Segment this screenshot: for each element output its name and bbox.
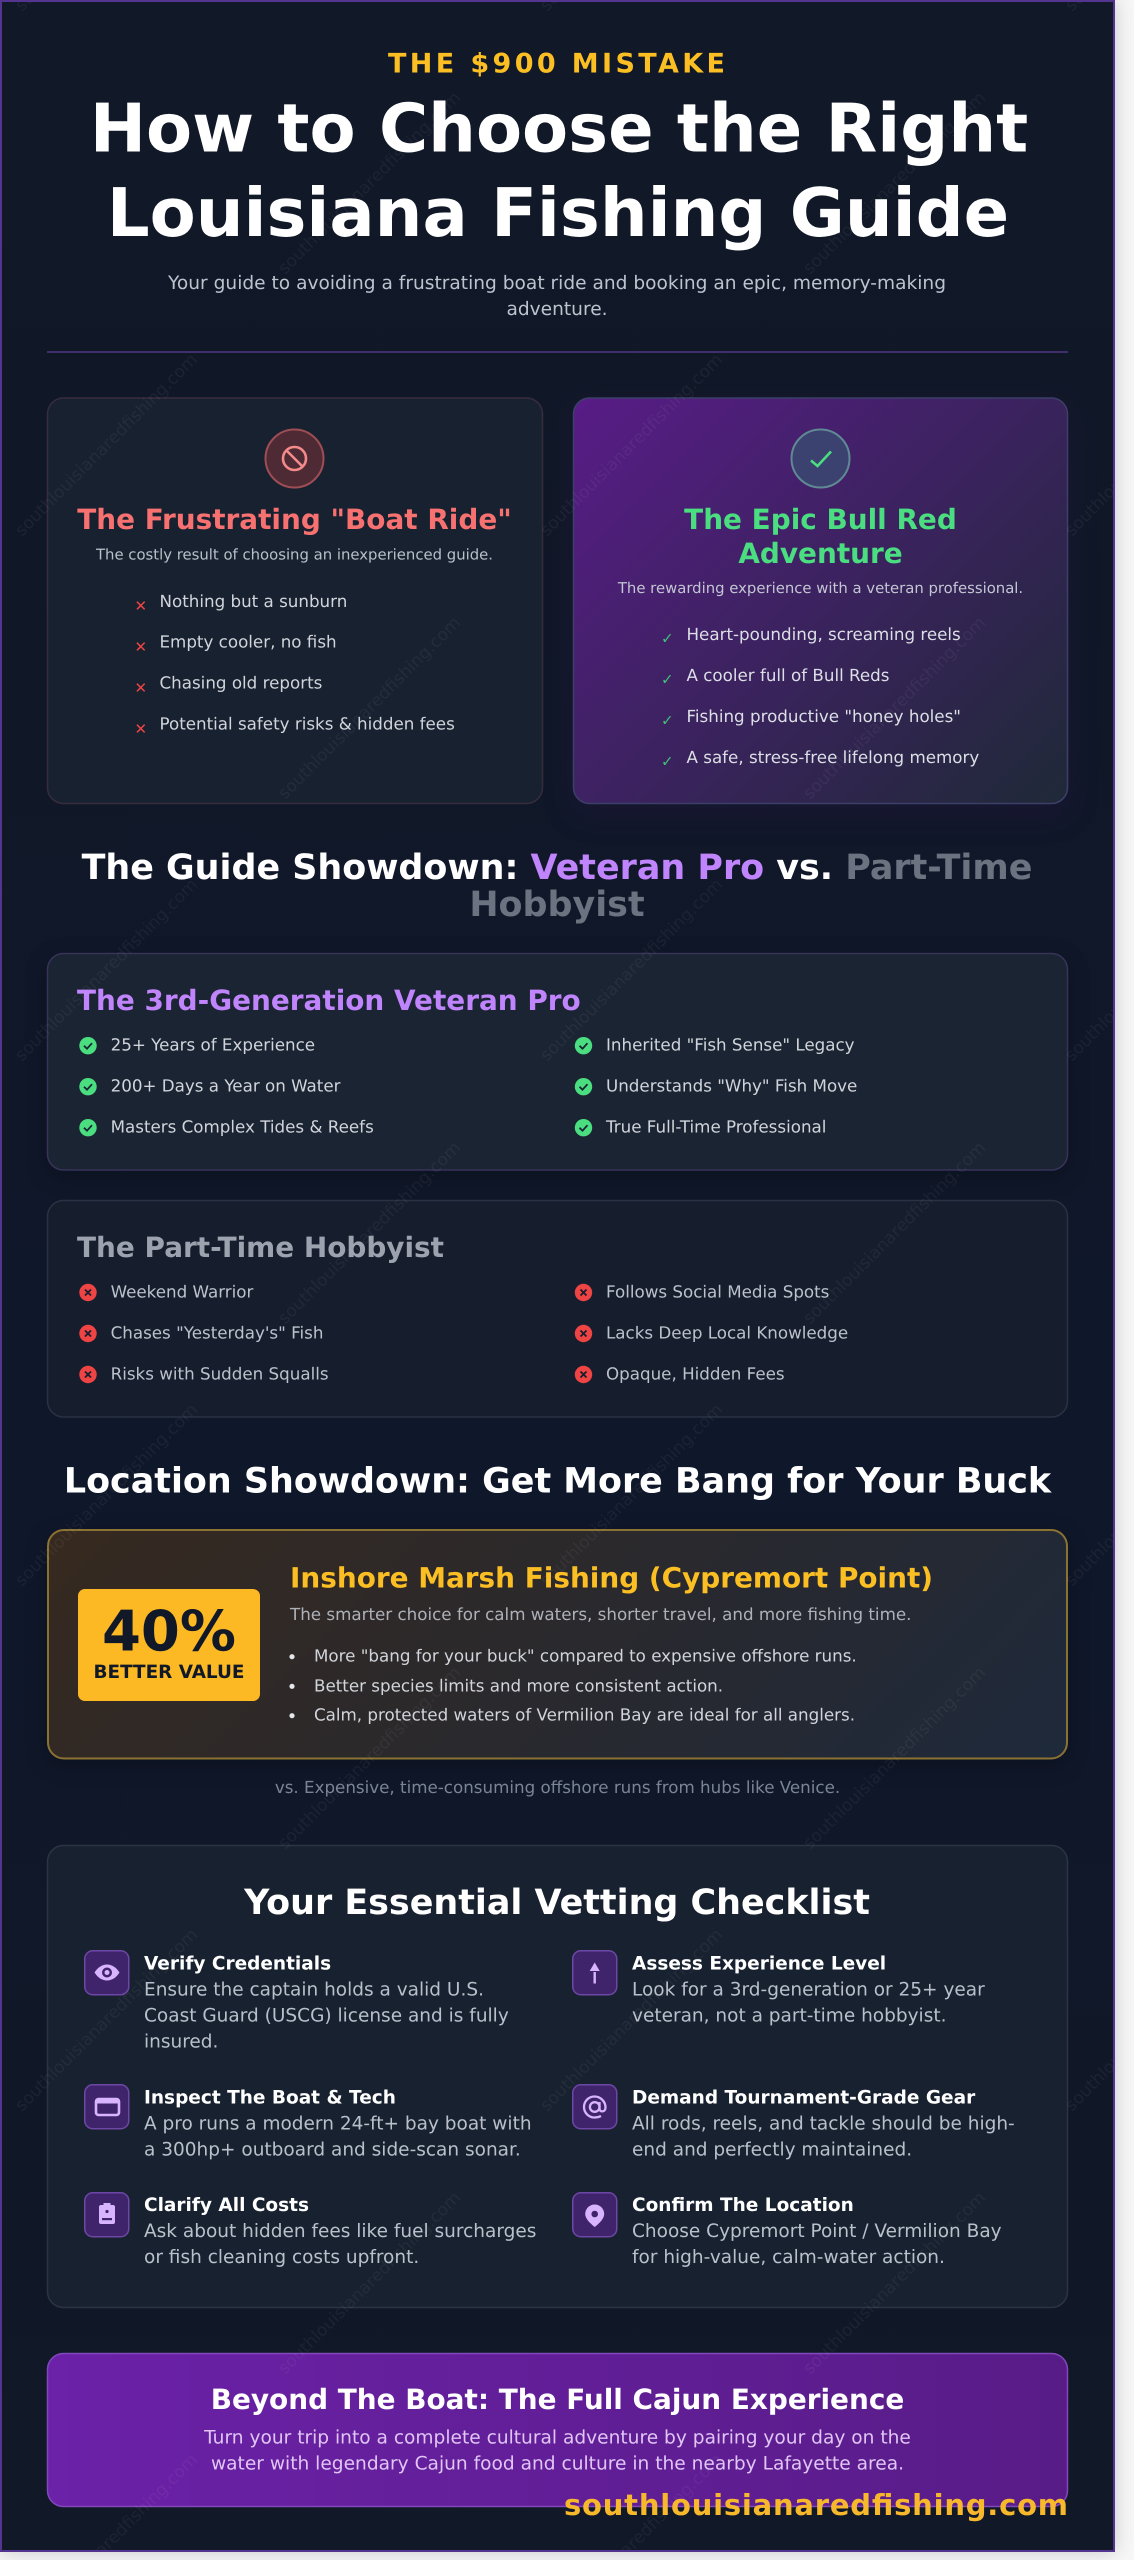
item: verify credentials: Coast Guard (USCG) license and is fully bbox=[144, 2006, 509, 2027]
text: southlouisianaredfishing.com bbox=[11, 1400, 202, 1591]
item: assess experience level: Assess Experience Level bbox=[632, 1953, 886, 1974]
panel: the frustrating boat ride bbox=[48, 398, 542, 804]
description: The costly result of choosing an inexperienced guide. bbox=[95, 545, 493, 563]
title: How to Choose the Right bbox=[90, 90, 1028, 168]
item: confirm the location: for high-value, calm-water action. bbox=[632, 2247, 945, 2268]
right column list bbox=[575, 1035, 857, 1136]
item: assess experience level bbox=[573, 1951, 985, 2027]
heading: guide showdown: Hobbyist bbox=[469, 885, 645, 925]
item: verify credentials: Ensure the captain holds a valid U.S. bbox=[144, 1980, 484, 2001]
right column list: Lacks Deep Local Knowledge bbox=[606, 1323, 848, 1343]
list of negatives: ✕ bbox=[134, 720, 147, 738]
item: verify credentials bbox=[85, 1951, 509, 2053]
heading: Beyond The Boat: The Full Cajun Experience bbox=[211, 2383, 904, 2416]
right column list: Opaque, Hidden Fees bbox=[606, 1364, 785, 1384]
panel: part-time hobbyist bbox=[48, 1200, 1068, 1417]
list of positives: A safe, stress-free lifelong memory bbox=[686, 747, 979, 767]
list of positives: ✓ bbox=[661, 752, 674, 770]
item: inspect the boat and tech: A pro runs a modern 24-ft+ bay boat with bbox=[144, 2113, 532, 2134]
heading: The 3rd-Generation Veteran Pro bbox=[77, 984, 581, 1017]
left column list: 200+ Days a Year on Water bbox=[111, 1076, 341, 1096]
list of negatives bbox=[134, 591, 455, 738]
text: southlouisianaredfishing.com bbox=[536, 875, 727, 1066]
caption: offshore comparison: vs. Expensive, time-consuming offshore runs from hubs like Venice. bbox=[275, 1777, 840, 1797]
heading: The Part-Time Hobbyist bbox=[77, 1231, 444, 1264]
subtitle: adventure. bbox=[506, 299, 608, 320]
list of negatives: Potential safety risks & hidden fees bbox=[160, 713, 455, 733]
description: Turn your trip into a complete cultural adventure by pairing your day on the bbox=[203, 2427, 911, 2448]
bullet list: Calm, protected waters of Vermilion Bay are ideal for all anglers. bbox=[314, 1705, 855, 1725]
heading: Inshore Marsh Fishing (Cypremort Point) bbox=[290, 1562, 933, 1594]
list of positives: Heart-pounding, screaming reels bbox=[686, 624, 961, 644]
item: confirm the location: Confirm The Location bbox=[632, 2195, 854, 2216]
text: southlouisianaredfishing.com bbox=[799, 2188, 990, 2379]
subtitle bbox=[167, 273, 946, 320]
badge: 40% better value: BETTER VALUE bbox=[94, 1662, 244, 1683]
heading: The Frustrating "Boat Ride" bbox=[77, 503, 512, 536]
item: inspect the boat and tech: a 300hp+ outboard and side-scan sonar. bbox=[144, 2139, 521, 2160]
list of negatives: Empty cooler, no fish bbox=[160, 632, 337, 652]
text: southlouisianaredfishing.com bbox=[274, 1663, 465, 1854]
list of positives bbox=[661, 624, 979, 770]
right column list: True Full-Time Professional bbox=[605, 1116, 826, 1136]
heading: Your Essential Vetting Checklist bbox=[243, 1883, 870, 1923]
list of positives: ✓ bbox=[661, 670, 674, 688]
item: demand tournament-grade gear: end and perfectly maintained. bbox=[632, 2139, 912, 2160]
text: southlouisianaredfishing.com bbox=[799, 88, 990, 279]
item: verify credentials: Verify Credentials bbox=[144, 1953, 331, 1974]
item: demand tournament-grade gear bbox=[573, 2085, 1015, 2160]
left column list: Chases "Yesterday's" Fish bbox=[111, 1323, 323, 1343]
heading: location showdown: Location Showdown: Get More Bang for Your Buck bbox=[64, 1462, 1052, 1502]
header bbox=[90, 49, 1028, 320]
item: confirm the location bbox=[573, 2193, 1002, 2268]
bullet list: Better species limits and more consistent action. bbox=[314, 1675, 723, 1695]
list of positives: ✓ bbox=[661, 630, 674, 648]
item: assess experience level: veteran, not a part-time hobbyist. bbox=[632, 2006, 946, 2027]
heading bbox=[684, 503, 957, 570]
title: Louisiana Fishing Guide bbox=[107, 174, 1009, 252]
eyebrow: THE $900 MISTAKE bbox=[388, 49, 725, 80]
panel: veteran pro bbox=[48, 954, 1068, 1170]
item: demand tournament-grade gear: All rods, reels, and tackle should be high- bbox=[632, 2113, 1015, 2134]
title bbox=[90, 90, 1028, 252]
item: inspect the boat and tech: Inspect The Boat & Tech bbox=[144, 2087, 396, 2108]
text: southlouisianaredfishing.com bbox=[274, 88, 465, 279]
bullet list bbox=[289, 1646, 857, 1725]
item: verify credentials: insured. bbox=[144, 2032, 218, 2053]
list of negatives: Nothing but a sunburn bbox=[160, 591, 347, 611]
left column list: Weekend Warrior bbox=[111, 1282, 254, 1302]
list of positives: ✓ bbox=[661, 712, 674, 730]
panel: beyond the boat bbox=[48, 2354, 1068, 2506]
description bbox=[203, 2427, 911, 2474]
list of negatives: ✕ bbox=[134, 679, 147, 697]
text: southlouisianaredfishing.com bbox=[11, 1925, 202, 2116]
badge: 40% better value: 40% bbox=[102, 1600, 236, 1665]
panel: vetting checklist bbox=[48, 1846, 1068, 2308]
right column list: Inherited "Fish Sense" Legacy bbox=[606, 1035, 855, 1055]
list of negatives: Chasing old reports bbox=[160, 672, 322, 692]
text: southlouisianaredfishing.com bbox=[536, 1925, 727, 2116]
icon: ban bbox=[266, 430, 324, 488]
list of negatives: ✕ bbox=[134, 638, 147, 656]
text: southlouisianaredfishing.com bbox=[11, 350, 202, 541]
left column list bbox=[79, 1035, 374, 1136]
text: southlouisianaredfishing.com bbox=[274, 613, 465, 804]
heading: guide showdown: The Guide Showdown: Veteran Pro vs. Part-Time bbox=[82, 848, 1032, 888]
subtitle: Your guide to avoiding a frustrating boat ride and booking an epic, memory-making bbox=[167, 273, 946, 294]
item: clarify all costs: Clarify All Costs bbox=[144, 2195, 309, 2216]
right column list: Follows Social Media Spots bbox=[606, 1282, 829, 1302]
text: southlouisianaredfishing.com bbox=[536, 350, 727, 541]
text: southlouisianaredfishing.com bbox=[799, 613, 990, 804]
text: southlouisianaredfishing.com bbox=[799, 1138, 990, 1329]
item: confirm the location: Choose Cypremort Point / Vermilion Bay bbox=[632, 2221, 1002, 2242]
text: southlouisianaredfishing.com bbox=[799, 1663, 990, 1854]
right column list: Understands "Why" Fish Move bbox=[606, 1076, 857, 1096]
item: demand tournament-grade gear: Demand Tournament-Grade Gear bbox=[632, 2087, 976, 2108]
left column list bbox=[79, 1282, 329, 1384]
text: southlouisianaredfishing.com bbox=[274, 1138, 465, 1329]
list of positives: Fishing productive "honey holes" bbox=[686, 706, 961, 726]
panel: inshore marsh fishing bbox=[48, 1530, 1067, 1758]
panel: the epic bull red adventure bbox=[574, 398, 1068, 804]
right column list bbox=[575, 1282, 848, 1384]
description: water with legendary Cajun food and culture in the nearby Lafayette area. bbox=[211, 2453, 904, 2474]
text: southlouisianaredfishing.com bbox=[274, 2188, 465, 2379]
text: southlouisianaredfishing.com bbox=[536, 1400, 727, 1591]
heading: guide showdown bbox=[82, 848, 1032, 925]
badge: 40% better value bbox=[78, 1589, 260, 1701]
icon: check bbox=[792, 430, 850, 488]
heading: The Epic Bull Red bbox=[684, 503, 957, 536]
item: assess experience level: Look for a 3rd-generation or 25+ year bbox=[632, 1980, 985, 2001]
text: southlouisianaredfishing.com bbox=[11, 875, 202, 1066]
left column list: 25+ Years of Experience bbox=[111, 1035, 315, 1055]
website url: southlouisianaredfishing.com bbox=[564, 2488, 1068, 2522]
description: The rewarding experience with a veteran professional. bbox=[617, 579, 1023, 597]
bullet list: More "bang for your buck" compared to expensive offshore runs. bbox=[314, 1646, 857, 1666]
description: The smarter choice for calm waters, shorter travel, and more fishing time. bbox=[289, 1604, 911, 1624]
item: clarify all costs bbox=[85, 2193, 536, 2268]
left column list: Risks with Sudden Squalls bbox=[111, 1364, 329, 1384]
heading: Adventure bbox=[738, 537, 903, 570]
item: clarify all costs: Ask about hidden fees like fuel surcharges bbox=[144, 2221, 536, 2242]
left column list: Masters Complex Tides & Reefs bbox=[111, 1116, 374, 1136]
item: inspect the boat and tech bbox=[85, 2085, 532, 2160]
item: clarify all costs: or fish cleaning costs upfront. bbox=[144, 2247, 419, 2268]
list of positives: A cooler full of Bull Reds bbox=[686, 665, 890, 685]
list of negatives: ✕ bbox=[134, 597, 147, 615]
